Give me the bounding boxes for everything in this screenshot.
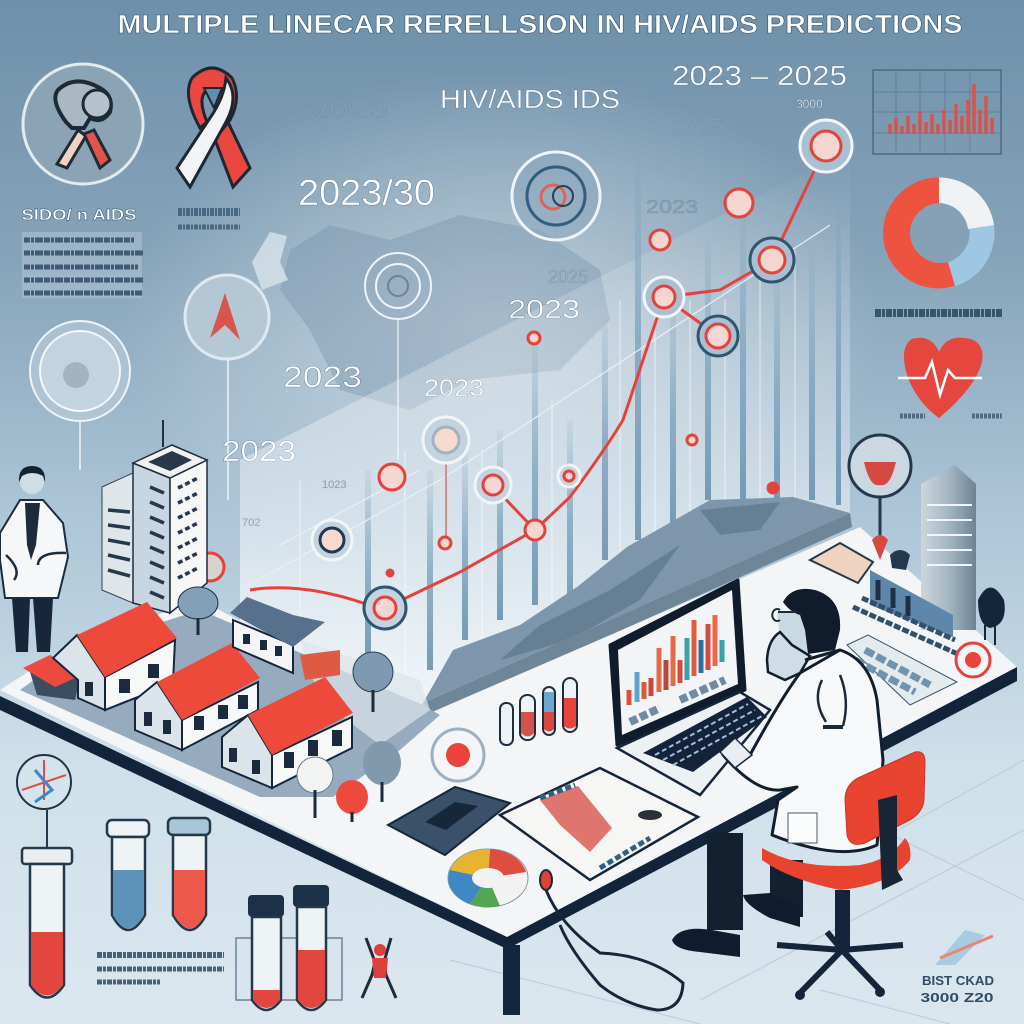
bottom right caption (920, 930, 994, 1005)
building (102, 420, 207, 613)
laptop (610, 580, 770, 795)
houses (23, 587, 401, 822)
right tower and pin (849, 435, 976, 630)
sample tubes blue and red (107, 818, 210, 930)
red chair back (845, 752, 925, 890)
vials on desk (432, 678, 577, 781)
scenery patch under houses (20, 610, 440, 797)
map and base strip (423, 497, 850, 703)
year labels: 702 (242, 517, 260, 529)
year labels: 2023 – 2025 (672, 60, 847, 91)
icon: heart with pulse (898, 338, 1002, 418)
axis line (240, 225, 830, 590)
text block: small heading (178, 212, 240, 227)
year labels: 2023 (646, 197, 698, 217)
book on desk (810, 543, 873, 583)
donut chart (883, 177, 994, 288)
red chair base and seat (762, 838, 910, 1000)
icon: awareness ribbon (177, 68, 250, 187)
bottom caption (97, 955, 224, 982)
year labels: 2025 (672, 114, 725, 141)
red trend line (250, 146, 826, 608)
mini line chart (873, 70, 1001, 154)
scientist at laptop (672, 589, 925, 1000)
left text block (22, 207, 144, 298)
left text block: SIDO/ n AIDS (22, 207, 137, 224)
year labels: 1023 (322, 479, 346, 491)
bottom right caption: BIST CKAD (922, 973, 994, 988)
year labels: 3000 (796, 97, 823, 111)
paper with sketch (500, 768, 698, 880)
year labels: 2023 (283, 361, 362, 394)
year labels: 2023 (424, 375, 484, 402)
city block and documents (847, 570, 1005, 705)
notebook (388, 787, 510, 855)
year labels: 2025 (548, 267, 588, 287)
title: MULTIPLE LINECAR RERELLSION IN HIV/AIDS PREDICTIONS (118, 9, 963, 39)
year labels (222, 60, 847, 529)
year labels: 2023 (309, 97, 389, 124)
data markers (196, 120, 852, 629)
trees (178, 587, 401, 822)
cable and mouse (540, 870, 683, 1010)
test tube with red liquid (17, 755, 72, 998)
pie disc on desk (448, 849, 528, 907)
year labels: 2023/30 (298, 172, 435, 213)
icon: small figure (362, 938, 396, 998)
beaker with vials (236, 885, 342, 1010)
head (767, 589, 840, 680)
ring icons, center (185, 152, 600, 500)
regression chart (196, 120, 852, 719)
icon: magnifier ribbon badge (23, 64, 143, 184)
caption bar (875, 309, 1003, 317)
doctor standing left (0, 466, 68, 652)
year labels: HIV/AIDS IDS (440, 84, 620, 114)
year labels: 2023 (508, 294, 580, 324)
left ring icon (30, 321, 130, 470)
bottom right caption: 3000 Z20 (920, 990, 994, 1005)
lab coat (723, 650, 883, 852)
hand on keyboard (720, 738, 752, 768)
year labels: 2023 (222, 436, 296, 468)
desk (0, 527, 1017, 1015)
